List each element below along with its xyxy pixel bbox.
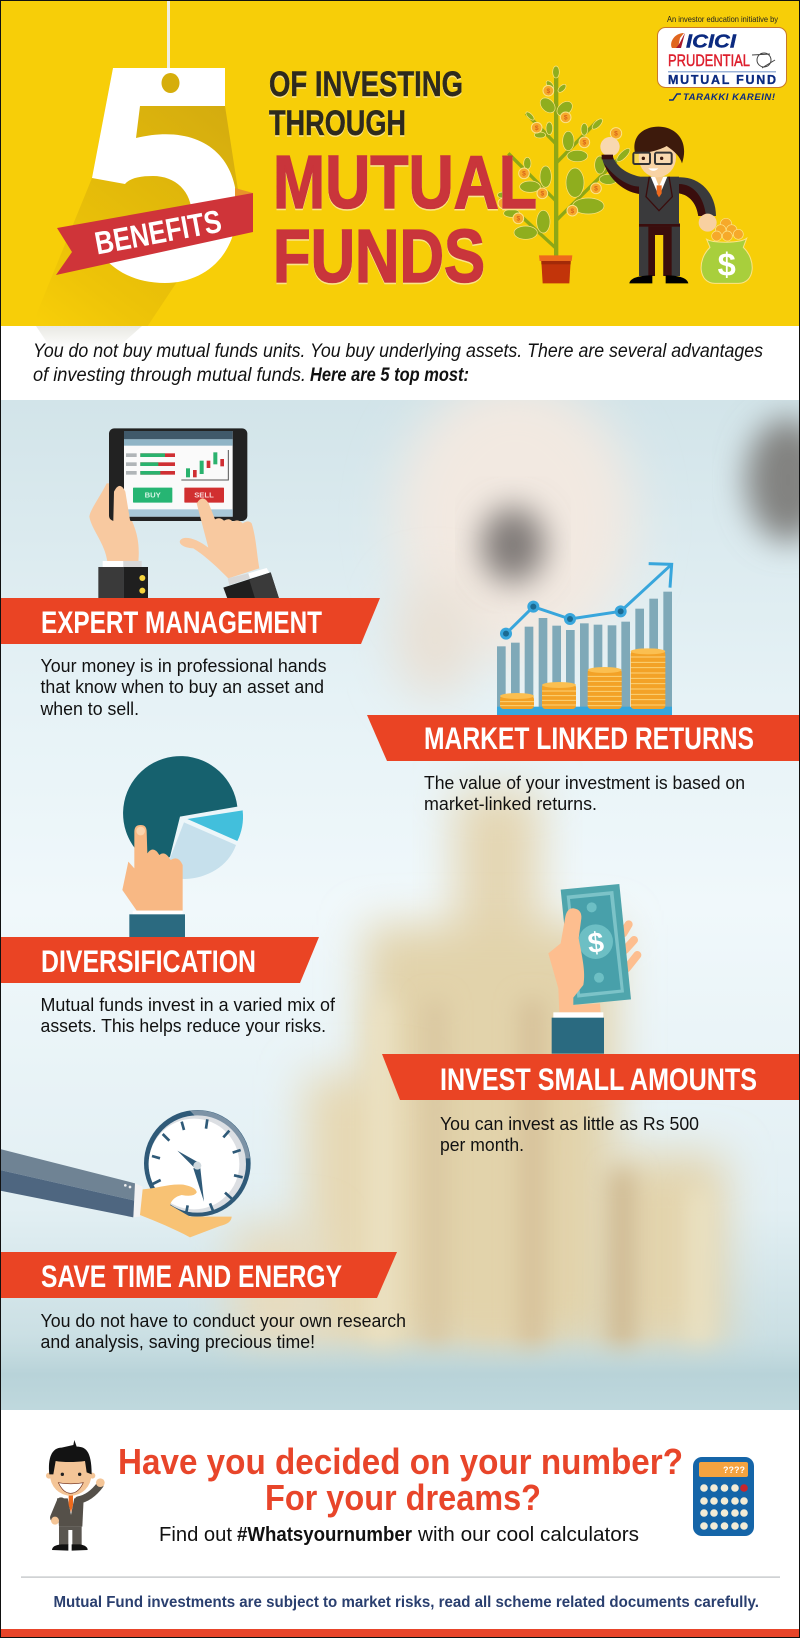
- headline: [118, 1441, 683, 1518]
- body text: Mutual funds invest in a varied mix of: [40, 994, 336, 1015]
- icon: tablet with hands: SELL: [194, 490, 214, 499]
- section: expert management: [0, 598, 380, 719]
- heading band: DIVERSIFICATION: [41, 943, 256, 979]
- number five: [92, 68, 237, 283]
- heading: of investing through: THROUGH: [269, 104, 406, 143]
- heading: mutual funds: MUTUAL: [273, 140, 537, 224]
- trend line: [506, 564, 672, 634]
- heading band: [0, 937, 319, 983]
- character: waving man: [46, 1440, 105, 1551]
- icon: money tree: $: [522, 171, 526, 178]
- left cuff: [103, 561, 123, 567]
- icon: money tree: $: [614, 131, 618, 138]
- icon: calculator: ????: [723, 1465, 745, 1475]
- body text: [40, 1310, 406, 1352]
- fingers behind note: [623, 924, 637, 968]
- heading band: [0, 1252, 397, 1298]
- body text: assets. This helps reduce your risks.: [40, 1015, 326, 1036]
- heading: mutual funds: FUNDS: [273, 214, 485, 298]
- icon: pie chart with hand: [122, 756, 243, 937]
- left thumb: [113, 486, 139, 562]
- logo block: ICICI: [686, 30, 737, 52]
- body text: [424, 772, 745, 814]
- raised arm: [602, 155, 640, 194]
- money bag: [701, 238, 752, 283]
- section: save time and energy: [0, 1252, 406, 1352]
- icon: money tree: $: [594, 186, 598, 193]
- intro text: Here are 5 top most:: [310, 365, 469, 386]
- subline: Find out: [159, 1524, 232, 1546]
- icon: bar chart with coin stacks: [497, 564, 672, 716]
- body text: You can invest as little as Rs 500: [440, 1113, 699, 1134]
- heading band: SAVE TIME AND ENERGY: [41, 1258, 342, 1294]
- icon: calculator: [693, 1457, 754, 1536]
- icon: tablet with hands: [89, 428, 279, 598]
- icon: hand holding banknote: $: [586, 927, 605, 960]
- intro text: You do not buy mutual funds units. You buy underlying assets. There are several advantages: [33, 341, 763, 362]
- body text: when to sell.: [40, 698, 139, 719]
- disclaimer: Mutual Fund investments are subject to market risks, read all scheme related documents carefully.: [54, 1594, 759, 1611]
- heading: mutual funds: [273, 140, 537, 298]
- hand: [140, 1184, 232, 1237]
- icon: money tree: $: [570, 208, 574, 215]
- left palm behind tablet: [89, 483, 139, 562]
- hand: [122, 825, 183, 911]
- heading band: [382, 1054, 800, 1100]
- panel: call to action: [46, 1440, 754, 1551]
- section: invest small amounts: [382, 1054, 800, 1155]
- icon: money tree: $: [516, 216, 520, 223]
- headline: For your dreams?: [265, 1477, 541, 1518]
- heading band: [0, 598, 380, 644]
- tablet: [109, 428, 247, 521]
- logo block: TARAKKI KAREIN!: [683, 92, 775, 103]
- panel: blurred photo background: [0, 380, 800, 1413]
- right hand: [180, 498, 259, 578]
- logo block: MUTUAL FUND: [668, 73, 776, 87]
- trousers and shoes: [639, 223, 680, 276]
- intro text: [33, 341, 763, 386]
- subline: [159, 1524, 639, 1546]
- hanging cord: [167, 0, 170, 82]
- shadow on white strip: [36, 326, 142, 350]
- body text: [40, 655, 326, 719]
- body text: and analysis, saving precious time!: [40, 1331, 315, 1352]
- hand: [548, 908, 601, 1012]
- icon: tablet with hands: BUY: [145, 490, 161, 499]
- heading band: EXPERT MANAGEMENT: [41, 604, 322, 640]
- footer bar: [0, 1629, 800, 1638]
- logo block: [658, 14, 786, 103]
- body text: You do not have to conduct your own research: [40, 1310, 406, 1331]
- long shadow of number five: [54, 106, 238, 326]
- body text: [440, 1113, 699, 1155]
- subline: with our cool calculators: [417, 1524, 639, 1546]
- lowered arm: [679, 177, 716, 216]
- logo block: PRUDENTIAL: [668, 51, 750, 70]
- body text: that know when to buy an asset and: [40, 676, 324, 697]
- ribbon: benefits: [56, 188, 253, 275]
- heading: of investing through: OF INVESTING: [269, 65, 463, 104]
- icon: money tree: $: [540, 191, 544, 198]
- icon: money tree: $: [564, 115, 568, 122]
- right cuff: [228, 573, 250, 585]
- icon: money tree: $: [535, 125, 539, 132]
- body text: [40, 994, 336, 1036]
- icon: money tree: $: [582, 140, 586, 147]
- icon: money tree: $: [546, 88, 550, 95]
- body text: per month.: [440, 1134, 524, 1155]
- ribbon: benefits: BENEFITS: [92, 203, 224, 262]
- logo block: An investor education initiative by: [667, 14, 779, 24]
- panel: header: [0, 0, 800, 350]
- icon: businessman with money bag: [600, 127, 752, 283]
- intro text: of investing through mutual funds.: [33, 365, 306, 386]
- body text: The value of your investment is based on: [424, 772, 745, 793]
- icon: hand holding banknote: [548, 884, 637, 1054]
- section: diversification: [0, 937, 336, 1036]
- icon: clock held in hand: [0, 1110, 251, 1237]
- headline: Have you decided on your number?: [118, 1441, 683, 1482]
- coin stacks: [500, 651, 665, 709]
- body text: market-linked returns.: [424, 793, 597, 814]
- icon: businessman with money bag: $: [718, 245, 736, 282]
- heading band: [367, 715, 800, 761]
- head: [639, 137, 676, 177]
- body text: Your money is in professional hands: [40, 655, 326, 676]
- heading: of investing through: [269, 65, 463, 143]
- icon: money tree: [497, 66, 632, 283]
- section: market linked returns: [367, 715, 800, 814]
- subline: #Whatsyournumber: [237, 1524, 412, 1546]
- jacket: [639, 177, 679, 224]
- sleeve: [0, 1149, 135, 1201]
